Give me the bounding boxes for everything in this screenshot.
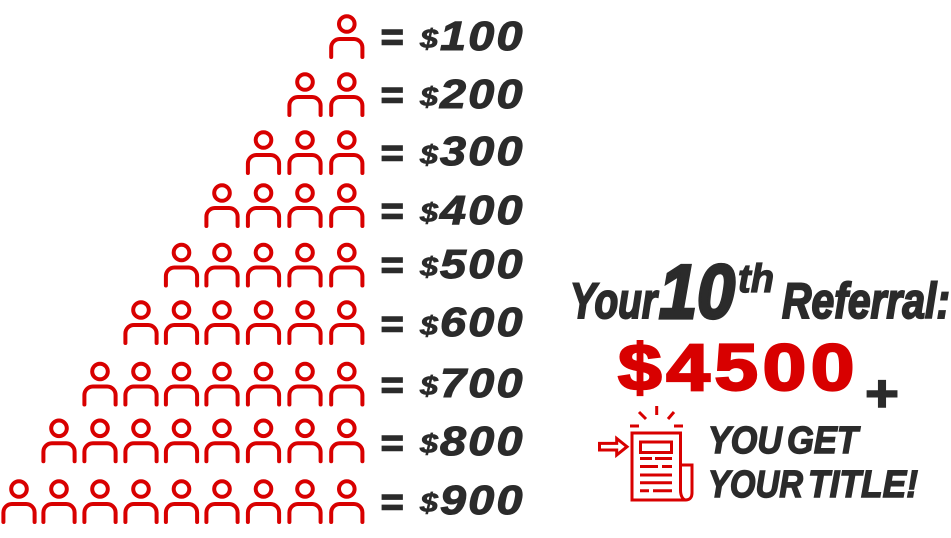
row 9: nine people = $900: 900 [440,478,525,523]
row 2: two people = $200: $ [419,82,439,112]
heading: your 10th referral: th [738,257,774,301]
row 3: three people = $300: $ [419,140,439,170]
row 6: six people = $600: = [380,304,403,346]
row 3: three people = $300: 300 [440,129,525,174]
row 6: six people = $600 [125,300,525,346]
row 4: four people = $400 [206,185,525,233]
row 1: one person = $100: 100 [440,14,525,59]
heading: your 10th referral: Your [570,273,659,329]
row 3: three people = $300: = [380,133,403,175]
row 9: nine people = $900 [3,478,525,524]
callout: you get your title: YOUR [708,464,803,506]
row 5: five people = $500: 500 [440,242,525,287]
icon: newspaper page [632,433,692,500]
row 4: four people = $400: $ [419,198,439,228]
row 6: six people = $600: 600 [440,300,525,345]
icon: rays [630,406,683,426]
row 7: seven people = $700: 700 [440,361,525,406]
callout: you get your title: YOU [708,420,783,462]
row 8: eight people = $800: = [380,423,403,465]
row 7: seven people = $700 [84,361,525,407]
row 1: one person = $100 [331,14,525,59]
heading: your 10th referral [570,250,950,335]
heading: your 10th referral: 10 [659,250,735,335]
row 8: eight people = $800: $ [419,429,439,459]
row 9: nine people = $900: = [380,482,403,524]
plus sign: + [865,365,899,423]
callout: you get your title: GET [787,420,861,462]
row 1: one person = $100: $ [419,24,439,54]
row 5: five people = $500: $ [419,252,439,282]
row 3: three people = $300 [248,129,525,175]
row 7: seven people = $700: = [380,365,403,407]
row 5: five people = $500 [166,242,525,287]
row 1: one person = $100: = [380,17,403,59]
icon: text lines [640,458,672,491]
row 9: nine people = $900: $ [419,488,439,518]
row 5: five people = $500: = [380,245,403,287]
row 2: two people = $200: = [380,75,403,117]
row 6: six people = $600: $ [419,311,439,341]
row 8: eight people = $800: 800 [440,419,525,464]
amount: $4500: $4500 [618,331,859,405]
icon: newspaper with arrow [600,406,692,500]
row 2: two people = $200: 200 [439,72,525,117]
icon: arrow [600,438,627,455]
callout: you get your title: TITLE! [808,464,918,506]
row 2: two people = $200 [289,72,525,117]
callout: you get your title [708,420,918,506]
row 8: eight people = $800 [43,419,525,465]
row 4: four people = $400: 400 [439,188,525,233]
icon: headline box [640,442,672,452]
row 7: seven people = $700: $ [419,371,439,401]
row 4: four people = $400: = [380,191,403,233]
